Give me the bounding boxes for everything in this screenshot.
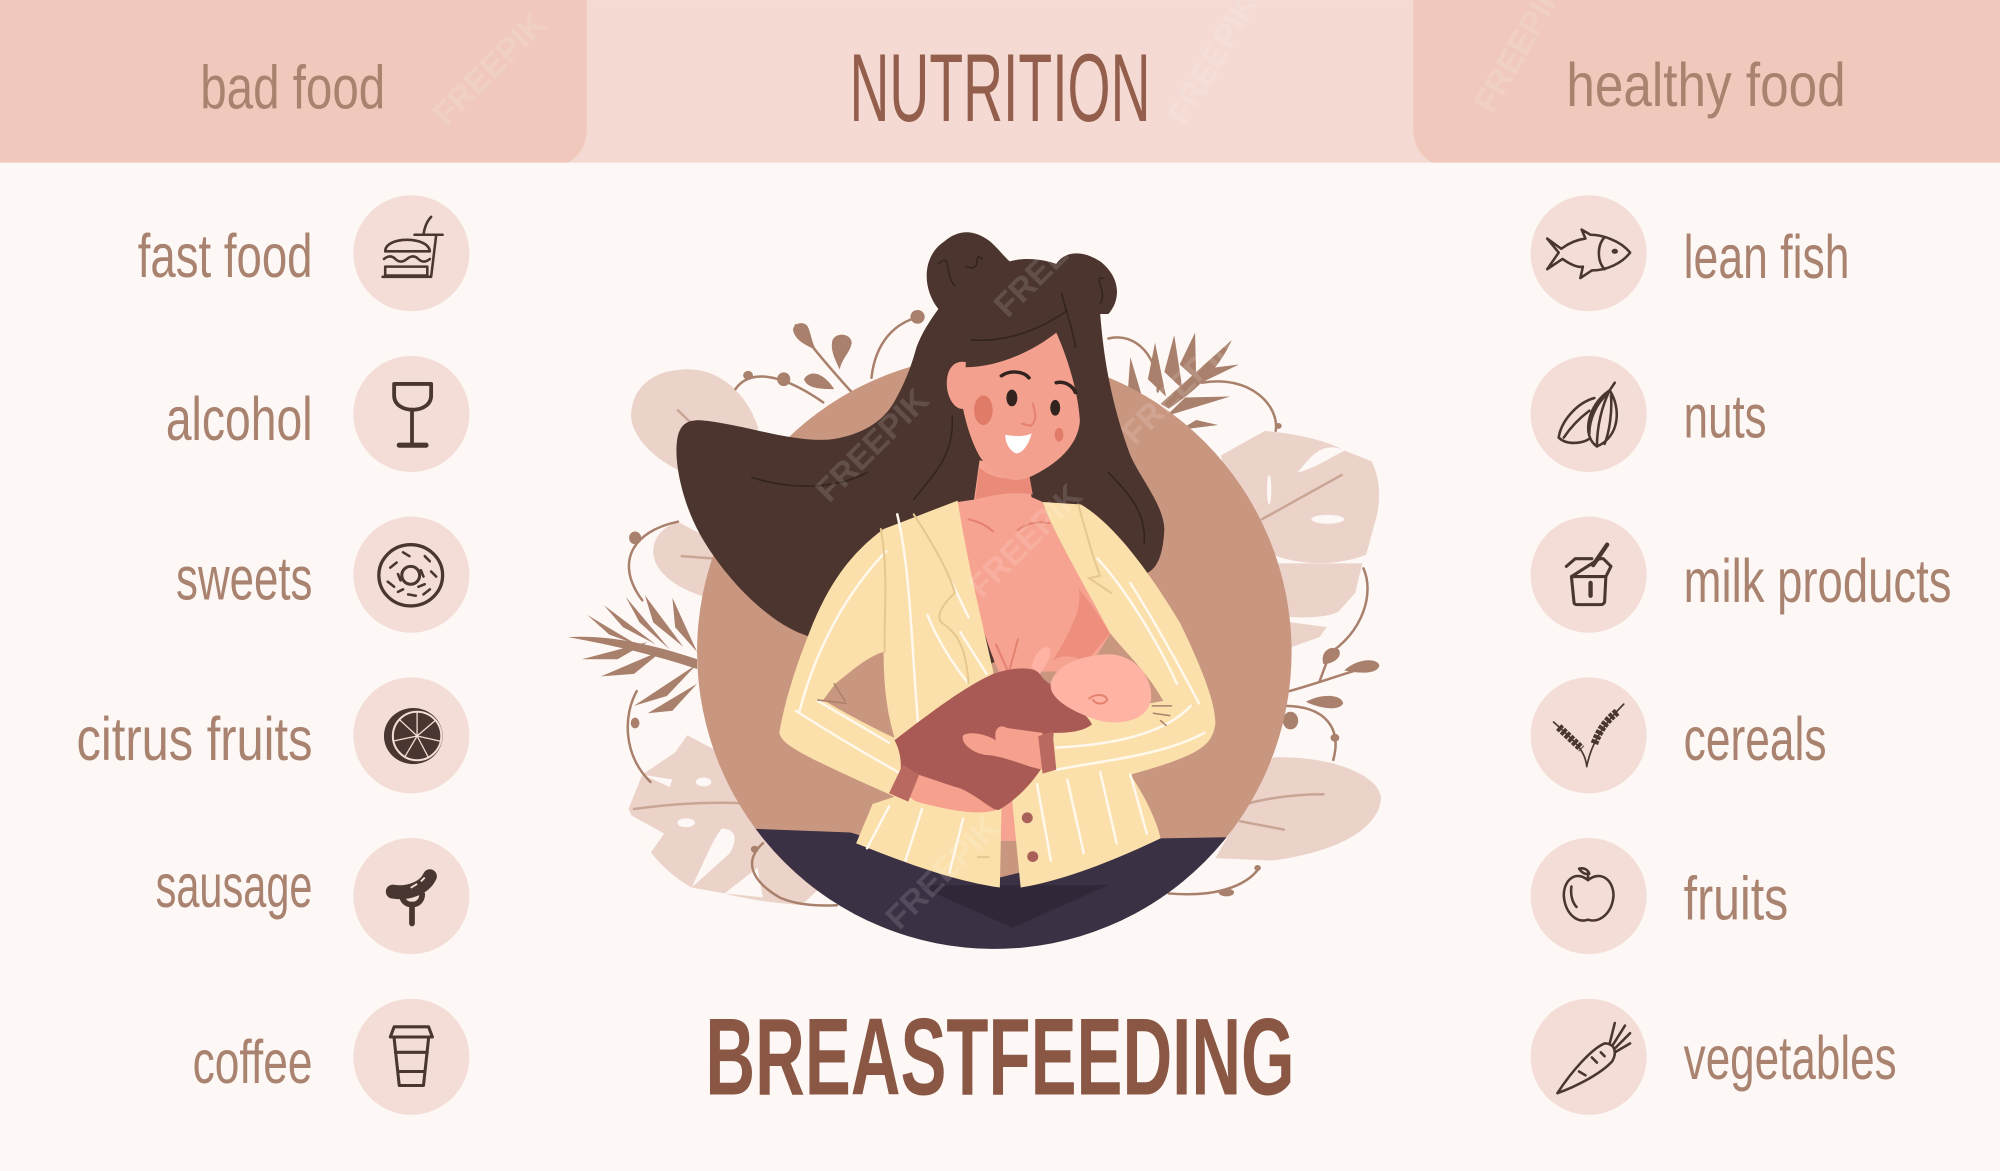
header band <box>0 0 2000 163</box>
breast shade <box>1051 588 1110 664</box>
trousers <box>756 828 1227 949</box>
panel: healthy food list <box>1531 195 1952 1115</box>
upper cuff <box>1038 731 1056 774</box>
item: alcohol: alcohol <box>166 385 312 453</box>
watermarks: FREEPIK <box>987 197 1115 325</box>
item: alcohol <box>166 356 469 472</box>
heading: bad food: bad food <box>200 53 385 121</box>
item: nuts <box>1531 356 1767 472</box>
item: fruits <box>1531 838 1788 954</box>
leaves behind circle <box>629 369 1381 905</box>
heading: healthy food: healthy food <box>1566 51 1846 119</box>
watermarks: FREEPIK <box>962 477 1089 605</box>
leaf veins <box>634 410 1342 830</box>
item: sweets <box>176 517 469 633</box>
panel: bad food header <box>0 0 587 163</box>
baby ear <box>1089 695 1107 704</box>
background circle <box>697 355 1292 949</box>
lapels <box>881 505 1111 857</box>
item: fast food <box>138 195 469 311</box>
panel: bad food list <box>77 195 469 1115</box>
arm gap left <box>823 652 895 738</box>
hair <box>676 232 1164 691</box>
watermarks: FREEPIK <box>426 5 554 133</box>
item: coffee <box>193 999 469 1115</box>
item: fast food: fast food <box>138 222 312 290</box>
heading: nutrition: NUTRITION <box>849 33 1151 142</box>
item: lean fish <box>1531 195 1849 311</box>
eyes, brows, smile <box>1001 372 1076 453</box>
item: fruits: fruits <box>1684 865 1788 933</box>
item: lean fish: lean fish <box>1684 223 1849 291</box>
title: breastfeeding: BREASTFEEDING <box>705 996 1295 1118</box>
item: citrus fruits: citrus fruits <box>77 705 312 773</box>
blush and nose <box>974 395 1063 442</box>
item: cereals: cereals <box>1684 705 1827 773</box>
collar lines <box>969 519 1049 669</box>
item: coffee: coffee <box>193 1028 312 1096</box>
lower cuff <box>889 765 919 802</box>
watermarks: FREEPIK <box>809 382 936 510</box>
leaf cuts <box>629 431 1383 897</box>
item: citrus fruits <box>77 677 469 793</box>
cardigan stripes <box>796 514 1204 873</box>
ear <box>947 362 966 409</box>
panel: healthy food header <box>1413 0 2000 163</box>
item: sausage <box>156 838 469 954</box>
mother's upper hand <box>963 726 1045 770</box>
branches and palm fronds <box>568 310 1379 905</box>
baby blanket <box>895 668 1092 810</box>
item: vegetables: vegetables <box>1684 1024 1897 1092</box>
buttons <box>1022 812 1038 862</box>
item: sweets: sweets <box>176 545 312 613</box>
face <box>959 333 1080 480</box>
watermarks <box>426 0 1571 937</box>
neck and chest <box>958 460 1111 671</box>
baby head <box>1051 654 1151 722</box>
item: cereals <box>1531 677 1827 793</box>
watermarks: FREEPIK <box>1115 324 1243 452</box>
nipple highlight <box>1032 647 1050 674</box>
neck shadow <box>975 468 1033 500</box>
mother's lower hand <box>907 772 996 812</box>
watermarks: FREEPIK <box>879 809 1007 937</box>
cardigan <box>779 501 1215 888</box>
illustration: breastfeeding mother <box>568 232 1383 986</box>
hair detail lines <box>752 257 1144 544</box>
item: sausage: sausage <box>156 852 312 920</box>
skin strip under baby <box>996 789 1018 841</box>
item: nuts: nuts <box>1684 383 1767 451</box>
item: milk products <box>1531 517 1952 633</box>
item: vegetables <box>1531 999 1897 1115</box>
sleeve wrinkles <box>818 684 1171 725</box>
